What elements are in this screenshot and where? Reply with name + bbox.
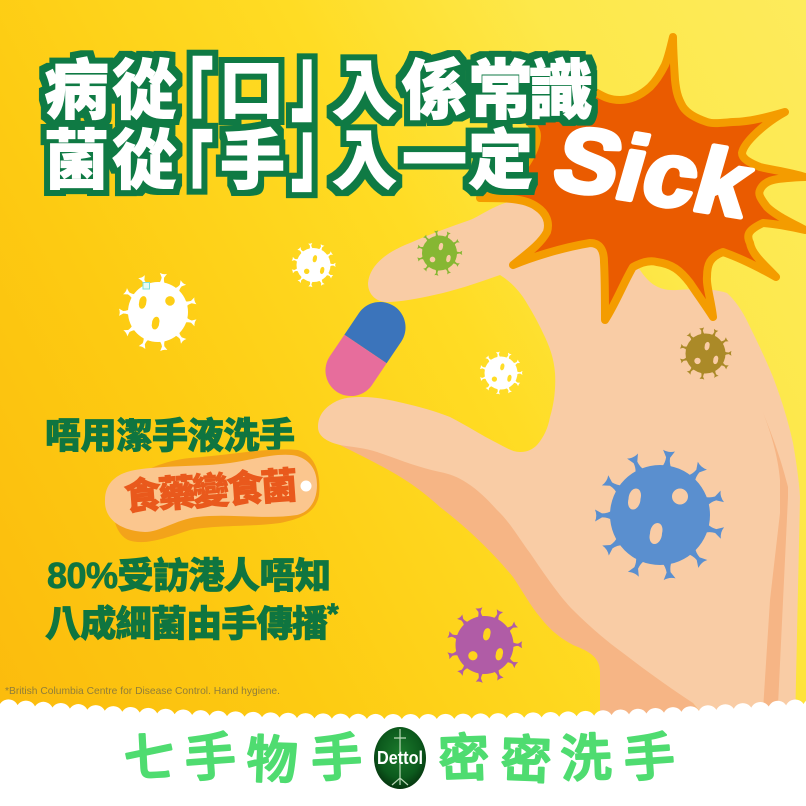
virus: brown [679,327,732,380]
statistic text [45,555,339,644]
Sick lettering: Sick [543,106,765,237]
pill blue half [344,292,415,363]
title line 2 opening bracket: 「 [158,126,213,229]
virus: small white [291,242,336,287]
title line 1 closing bracket: 」 [291,25,346,133]
hand illustration [318,190,800,726]
virus: white centre [479,351,523,395]
slogan left: 七手物手 [123,728,364,790]
title line 2 closing bracket: 」 [291,100,346,203]
virus: green [417,230,463,276]
statistic line 1: 80%受訪港人唔知 [47,555,331,596]
pill pink half [316,335,387,406]
Dettol logo [374,727,426,789]
selection marker [143,282,150,289]
slogan right: 密密洗手 [437,728,677,790]
virus: large white [118,273,197,352]
hand shadow [340,440,712,726]
white band [0,708,806,806]
callout bubble [105,449,319,542]
bubble sparkle [300,480,312,492]
bubble text: 食藥變食菌 [123,464,299,518]
hand crease [762,410,788,726]
logo sword [392,729,408,785]
title line 1 opening bracket: 「 [158,52,213,160]
asterisk: * [327,598,339,631]
virus: blue [593,450,726,582]
hand palm and fingers [318,190,800,726]
virus: purple [446,606,523,683]
capsule pill [316,292,415,406]
footer panel [0,708,806,806]
bubble front [105,455,317,532]
footnote: *British Columbia Centre for Disease Control. Hand hygiene. [5,685,280,697]
bubble back [113,449,319,542]
subheading: 唔用潔手液洗手 [45,415,295,456]
starburst [480,37,805,320]
title line 2: 菌從手入一定 [44,124,533,197]
title line 1: 病從口入係常識 [44,54,593,127]
logo shield [374,727,426,789]
statistic line 2: 八成細菌由手傳播 [45,603,328,644]
scalloped edge [0,708,806,724]
title [44,25,593,229]
logo wordmark: Dettol [377,748,423,768]
